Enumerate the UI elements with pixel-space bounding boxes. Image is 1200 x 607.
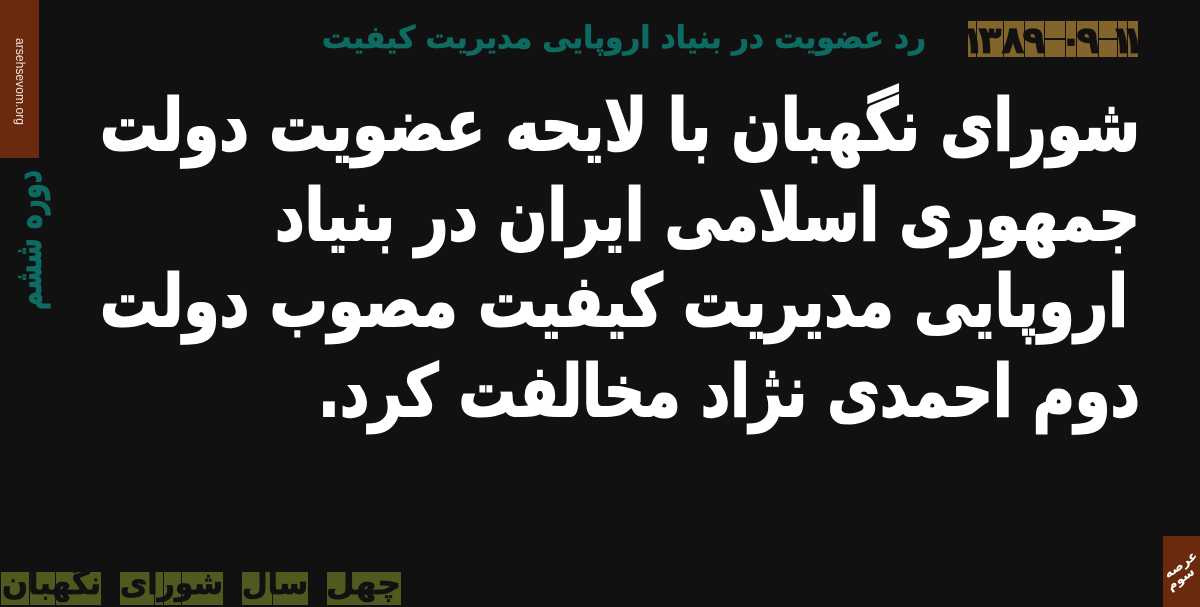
logo block bbox=[1161, 536, 1200, 607]
date stamp: ۱ bbox=[1121, 18, 1145, 62]
date stamp: ۱ bbox=[1110, 18, 1134, 62]
date stamp: ۰ bbox=[1059, 18, 1083, 62]
date stamp: ۸ bbox=[1001, 18, 1025, 62]
headline bbox=[100, 83, 1140, 434]
date stamp: ۳ bbox=[978, 18, 1002, 62]
subtitle: رد عضویت در بنیاد اروپایی مدیریت کیفیت bbox=[322, 20, 926, 56]
footer stamp: forty years of the Guardian Council: نگهبان bbox=[2, 564, 101, 602]
footer stamp: forty years of the Guardian Council: سال bbox=[242, 564, 308, 602]
vertical label: session: دوره ششم bbox=[6, 170, 51, 310]
footer stamp: forty years of the Guardian Council: شورای bbox=[120, 564, 223, 602]
logo block: سوم bbox=[1164, 564, 1198, 594]
footer stamp: forty years of the Guardian Council: چهل bbox=[326, 564, 401, 602]
panel: site name tab: arsehsevom.org bbox=[13, 38, 27, 125]
logo block: عرصه bbox=[1161, 548, 1200, 582]
date stamp: ۹ bbox=[1022, 18, 1046, 62]
date stamp bbox=[961, 18, 1145, 62]
panel: site name tab bbox=[0, 0, 39, 158]
date stamp: ۹ bbox=[1076, 18, 1100, 62]
date stamp: ۱ bbox=[961, 18, 985, 62]
footer stamp: forty years of the Guardian Council bbox=[1, 564, 401, 605]
